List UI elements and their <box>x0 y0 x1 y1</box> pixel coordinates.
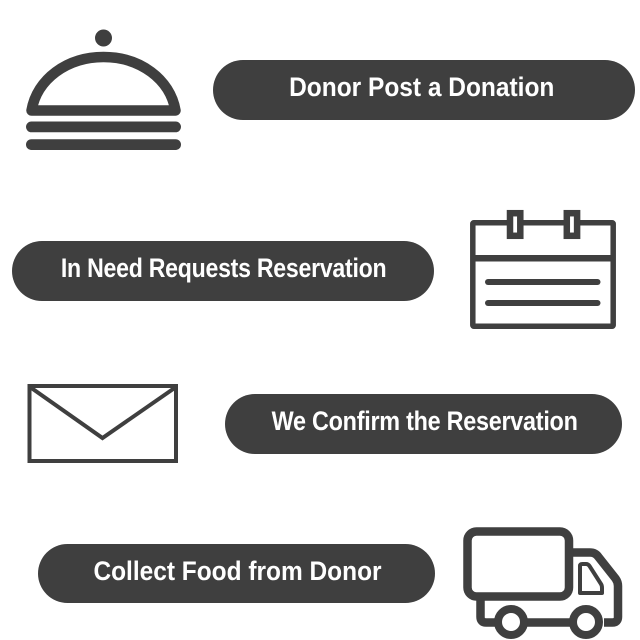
pill: In Need Requests Reservation <box>12 241 434 301</box>
icon: calendar <box>470 210 616 329</box>
pill: In Need Requests Reservation: In Need Requests Reservation <box>61 253 386 283</box>
pill: Donor Post a Donation: Donor Post a Donation <box>289 72 554 102</box>
pill: Collect Food from Donor: Collect Food from Donor <box>93 556 381 586</box>
icon: envelope <box>28 384 178 463</box>
pill: Collect Food from Donor <box>38 544 435 603</box>
pill: We Confirm the Reservation: We Confirm the Reservation <box>272 406 577 436</box>
icon: serving cloche <box>26 30 181 150</box>
icon: delivery truck <box>463 527 622 639</box>
pill: Donor Post a Donation <box>213 60 635 120</box>
pill: We Confirm the Reservation <box>225 394 622 454</box>
